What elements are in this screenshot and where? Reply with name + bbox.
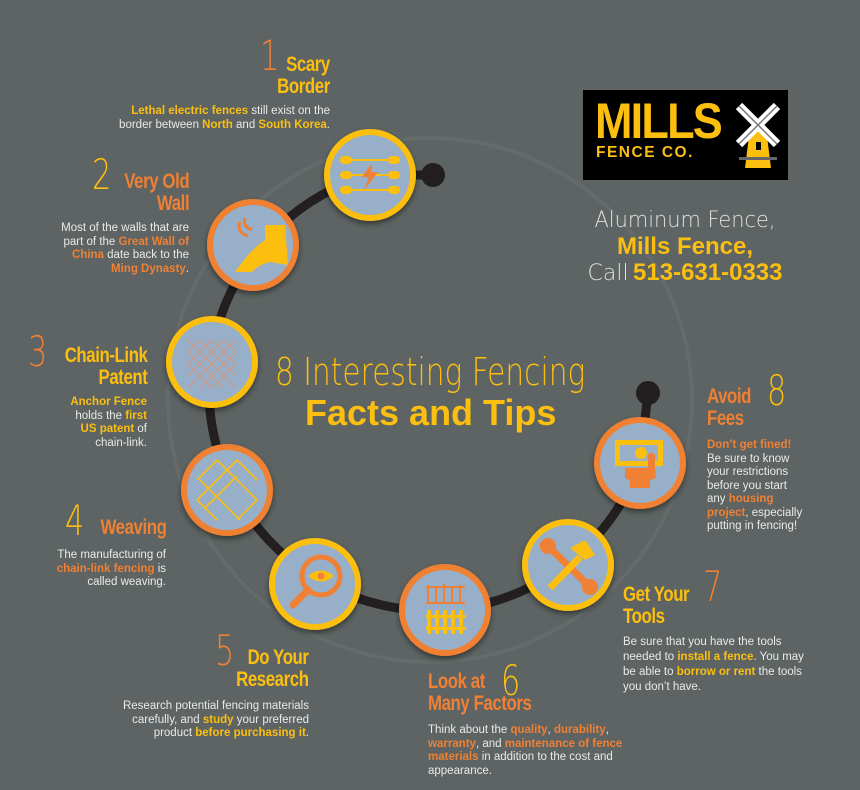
fact 2: part of the Great Wall of <box>64 236 189 248</box>
fact 3: Anchor Fence <box>70 396 147 408</box>
contact text: Aluminum Fence, <box>594 208 775 233</box>
fact 7 <box>623 562 804 693</box>
fact 5: carefully, and study your preferred <box>132 714 309 726</box>
fact 3: Patent <box>98 366 147 389</box>
icon 3: chain-link pattern <box>169 319 255 405</box>
fact 8: any housing <box>707 493 773 505</box>
fact 7: you don’t have. <box>623 681 701 693</box>
title: 8 Interesting Fencing <box>275 350 585 394</box>
fact 5 <box>123 626 309 739</box>
fact 3: Chain-Link <box>64 344 147 367</box>
logo: MILLS <box>595 93 721 149</box>
fact 8: Don’t get fined! <box>707 439 791 451</box>
fact 2: 2 <box>92 150 111 199</box>
fact 6: materials in addition to the cost and <box>428 751 613 763</box>
fact 4: 4 <box>65 496 84 545</box>
fact 1: Scary <box>286 53 330 76</box>
fact 1: 1 <box>260 31 279 80</box>
icon 8: money hand <box>597 420 683 506</box>
title: Facts and Tips <box>305 392 556 433</box>
icon 7: tools <box>525 522 611 608</box>
fact 8: your restrictions <box>707 466 788 478</box>
fact 3 <box>28 327 148 448</box>
title <box>275 350 585 433</box>
fact 8: Be sure to know <box>707 452 789 464</box>
fact 5: product before purchasing it. <box>154 727 309 739</box>
fact 2: Ming Dynasty. <box>111 262 189 274</box>
fact 3: chain-link. <box>95 436 147 448</box>
fact 6: warranty, and maintenance of fence <box>428 738 622 750</box>
fact 8: project, especially <box>707 506 802 518</box>
fact 8: Fees <box>707 407 744 430</box>
fact 2: Most of the walls that are <box>61 222 189 234</box>
contact text: Call 513-631-0333 <box>588 259 782 286</box>
fact 8: 8 <box>767 366 786 415</box>
fact 8: putting in fencing! <box>707 520 797 532</box>
fact 6 <box>428 656 622 776</box>
fact 3: US patent of <box>81 423 147 435</box>
icon 5: magnifier eye <box>272 541 358 627</box>
logo <box>583 90 788 180</box>
fact 4: chain-link fencing is <box>57 562 166 574</box>
logo: FENCE CO. <box>596 144 694 161</box>
icon: windmill <box>736 102 780 168</box>
fact 5: Do Your <box>248 646 309 669</box>
fact 6: appearance. <box>428 764 492 776</box>
icon 4: chain link big <box>184 447 270 533</box>
fact 4 <box>57 496 166 588</box>
fact 1: border between North and South Korea. <box>119 118 330 130</box>
fact 3: 3 <box>28 327 47 376</box>
fact 7: needed to install a fence. You may <box>623 651 804 663</box>
fact 6: 6 <box>501 656 520 705</box>
contact text <box>588 208 782 286</box>
icon 1: electric fence <box>327 132 413 218</box>
fact 7: Tools <box>623 605 665 628</box>
fact 7: Get Your <box>623 583 689 606</box>
fact 3: holds the first <box>75 410 147 422</box>
fact 4: Weaving <box>100 516 166 539</box>
fact 1 <box>119 31 330 130</box>
fact 8: before you start <box>707 480 787 492</box>
contact text: Mills Fence, <box>617 233 753 260</box>
fact 7: 7 <box>703 562 722 611</box>
fact 1: Border <box>277 75 330 98</box>
fact 1: Lethal electric fences still exist on the <box>131 105 330 117</box>
fact 5: 5 <box>215 626 234 675</box>
fact 4: called weaving. <box>87 576 166 588</box>
fact 7: be able to borrow or rent the tools <box>623 666 802 678</box>
fact 8: Avoid <box>707 385 751 408</box>
fact 6: Many Factors <box>428 692 532 715</box>
fact 7: Be sure that you have the tools <box>623 636 782 648</box>
fact 4: The manufacturing of <box>57 549 166 561</box>
fact 5: Research <box>237 668 309 691</box>
icon 2: great wall <box>210 202 296 288</box>
fact 2: Very Old <box>124 170 189 193</box>
fact 6: Look at <box>428 670 485 693</box>
fact 2 <box>61 150 189 274</box>
fact 6: Think about the quality, durability, <box>428 724 609 736</box>
icon 6: fences <box>402 567 488 653</box>
fact 2: Wall <box>157 192 189 215</box>
fact 8 <box>707 366 802 532</box>
fact 2: China date back to the <box>72 249 189 261</box>
fact 5: Research potential fencing materials <box>123 700 309 712</box>
